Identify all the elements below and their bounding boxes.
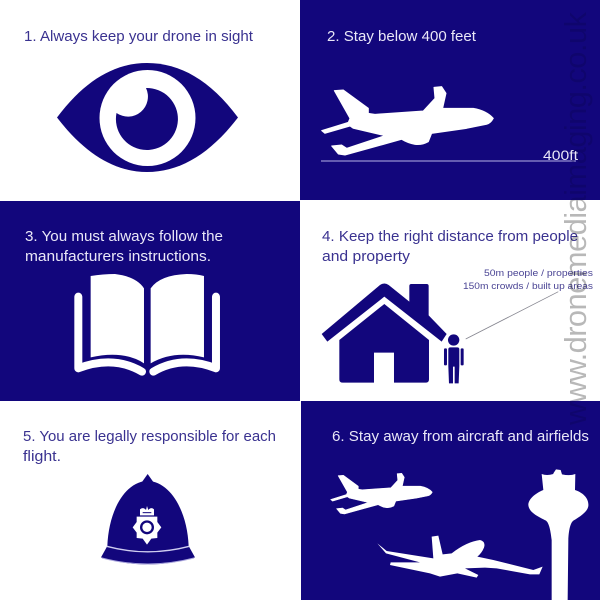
watermark: www.dronemediaimaging.co.uk <box>558 12 593 426</box>
heading 3: 3. You must always follow the <box>25 229 223 245</box>
panel 2: stay below 400 feet <box>300 0 600 200</box>
panel 1: keep drone in sight <box>0 0 300 200</box>
distance notes: 50m people / properties <box>484 268 594 278</box>
heading 4: 4. Keep the right distance from people <box>322 229 578 245</box>
distance notes: 150m crowds / built up areas <box>463 281 594 291</box>
panel 5: legally responsible <box>0 401 300 600</box>
leader line <box>466 292 558 339</box>
badge <box>133 506 161 545</box>
panel 6: stay away from aircraft and airfields <box>301 401 600 600</box>
panel 3: follow manufacturers instructions <box>0 201 300 401</box>
altitude label: 400ft <box>543 148 578 163</box>
icon: aeroplane from below <box>377 536 543 578</box>
icon: aeroplane <box>322 87 493 155</box>
distance notes <box>463 268 594 291</box>
icon: control tower <box>528 469 588 600</box>
heading 2: 2. Stay below 400 feet <box>327 29 476 45</box>
panel 5: legally responsible: flight. <box>23 449 61 465</box>
panel 3: follow manufacturers instructions: manufacturers instructions. <box>25 249 211 265</box>
icon: house <box>322 283 447 383</box>
icon: police helmet <box>101 474 195 564</box>
heading 1: 1. Always keep your drone in sight <box>24 29 253 45</box>
icon: eye <box>57 63 238 172</box>
heading 5: 5. You are legally responsible for each <box>23 429 276 445</box>
heading 6: 6. Stay away from aircraft and airfields <box>332 429 589 445</box>
panel 4: distance from people and property: and property <box>322 249 411 265</box>
icon: aeroplane side view <box>331 473 432 514</box>
icon: person <box>444 334 464 383</box>
panel 4: distance from people and property <box>300 201 600 401</box>
icon: open book <box>78 274 216 372</box>
altitude line <box>321 160 576 162</box>
